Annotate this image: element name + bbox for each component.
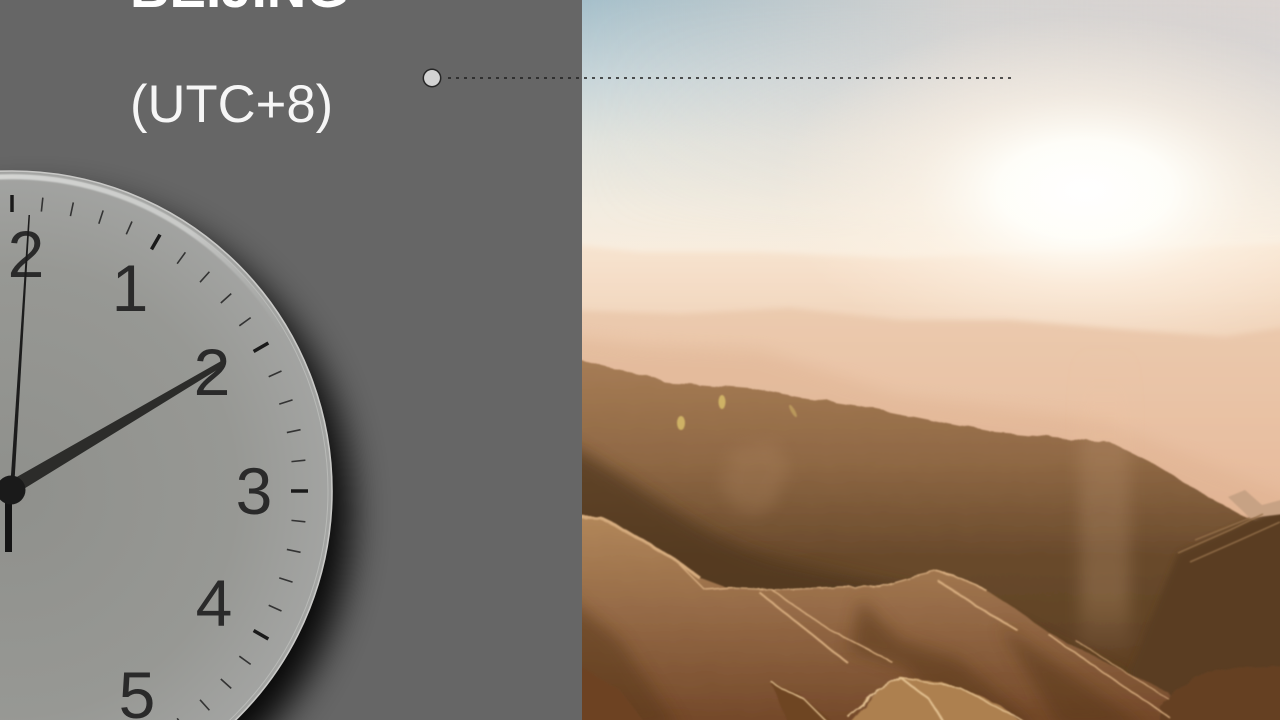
main mountain [582,360,1254,675]
clock numerals: 1 [112,251,148,325]
right ridge lines [1178,514,1280,562]
middle haze ridge [560,308,1280,530]
lens flares [677,395,798,430]
inner rim line [0,175,328,720]
lower haze band [582,340,1150,453]
clock numerals: 2 [8,217,44,291]
right dark mountain [1156,514,1280,622]
light shaft [1076,440,1134,642]
front lit peak [845,678,1031,720]
center hub [0,476,26,504]
warm sky tint [650,0,1280,106]
hour ticks [12,195,308,720]
foreground ridge [582,518,1170,720]
clock shadow [0,195,352,720]
lit mountain face [726,456,780,511]
sunlit ridge lines [575,517,1170,717]
main mountain dark lower slope [582,443,888,590]
minute hand [10,215,30,490]
hand tail [5,495,12,552]
minute ticks [41,198,305,720]
foreground shaded gullies [582,601,1133,720]
text block: time zone: (UTC+8) [130,75,333,134]
clock numerals: 2 [194,335,230,409]
hour hand [15,360,225,490]
clock numerals: 3 [236,454,272,528]
sun glow [870,46,1280,328]
sky [582,0,1280,262]
callout: marker dot [423,69,441,87]
panel: sunrise mountain photo [550,0,1280,720]
callout: dotted leader line [448,77,1011,79]
icon: wall clock [0,170,375,720]
clock face [0,171,332,720]
bottom left rugged slope [560,655,650,720]
distant right peaks [1228,490,1280,518]
clock numerals [8,217,272,720]
lower right rugged slope [1160,665,1280,720]
front peak highlights [772,678,1031,720]
upper rim highlight [0,177,284,334]
clock numerals: 4 [196,566,232,640]
far haze hills [582,246,1280,339]
rugged central spur [771,683,830,720]
panel: grey background [0,0,582,720]
